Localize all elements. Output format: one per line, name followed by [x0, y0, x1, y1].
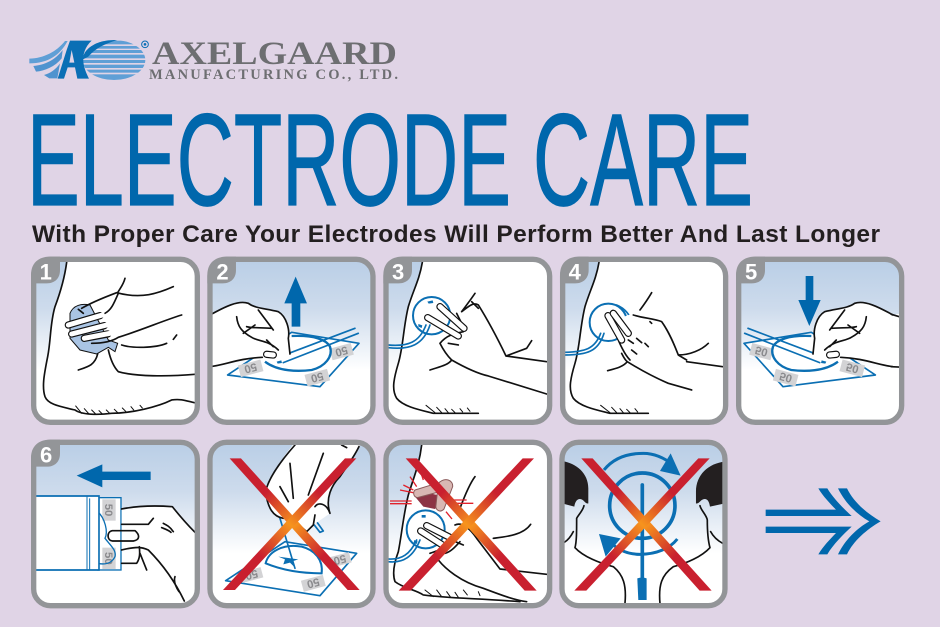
hand [122, 506, 194, 549]
arrow left [77, 464, 151, 487]
arrow up [284, 277, 307, 327]
electrode [413, 297, 450, 334]
step badge 2: 2 [216, 259, 229, 284]
panel: do not place on neck or head [562, 442, 725, 606]
step badge 5: 5 [745, 259, 757, 284]
subtitle: With Proper Care Your Electrodes Will Perform Better And Last Longer [32, 221, 880, 248]
panel: step 6 store in bag: 50 [102, 504, 114, 516]
panel: step 2 lift electrode [207, 257, 373, 422]
electrode sheet: 50 [243, 360, 258, 375]
panel: step 1 wipe skin [31, 257, 198, 423]
arrow down [798, 276, 821, 326]
panel: do not pull by lead: 50 [244, 567, 259, 581]
panel: step 4 press electrode [560, 257, 728, 423]
logo wordmark: AXELGAARD [152, 36, 397, 72]
electrode sheet: 50 [309, 369, 325, 384]
step badge 4: 4 [569, 259, 582, 284]
fingers [68, 316, 100, 325]
step badge 2 [207, 257, 236, 284]
bag [34, 496, 88, 570]
hand [448, 305, 550, 397]
electrode sheet [744, 328, 875, 387]
panel: step 6 store in bag [31, 440, 197, 606]
sheet in bag [98, 498, 121, 570]
electrode sheet [228, 328, 359, 387]
panel: do not pull by lead: 50 [332, 552, 347, 566]
hand [210, 302, 290, 367]
logo sub-line: MANUFACTURING CO., LTD. [149, 67, 398, 83]
red X [399, 458, 537, 591]
step badge 3: 3 [392, 259, 404, 284]
step badge 4 [560, 257, 589, 284]
panel: step 3 place electrode [383, 257, 552, 423]
electrode sheet: 50 [334, 343, 349, 358]
step badge 1: 1 [40, 259, 52, 284]
panel: step 6 store in bag: 50 [102, 552, 114, 565]
arrow: continue to next page [766, 488, 881, 554]
panel: do not pull by lead [210, 442, 373, 606]
panel: step 5 replace electrode [736, 257, 905, 422]
electrode sheet [226, 542, 357, 596]
step badge 1 [31, 257, 60, 284]
electrode circle and rotation arrows [599, 453, 681, 600]
logo mark [29, 39, 148, 81]
step badge 6: 6 [40, 442, 52, 467]
step badge 6 [31, 440, 60, 467]
bandages and sparks [390, 476, 474, 520]
heads [562, 461, 725, 603]
hand [813, 302, 905, 368]
step badge 5 [736, 257, 765, 284]
red X [574, 458, 712, 591]
step badge 3 [383, 257, 412, 284]
logo: Axelgaard [29, 40, 398, 82]
panel: do not apply to irritated skin [386, 442, 552, 607]
cloth [70, 304, 118, 354]
hand [266, 442, 360, 532]
hand [622, 314, 632, 336]
electrode [590, 304, 627, 341]
panel: do not pull by lead: 50 [305, 575, 321, 590]
red X [223, 458, 360, 590]
fingers [444, 540, 464, 554]
electrode [407, 510, 445, 548]
